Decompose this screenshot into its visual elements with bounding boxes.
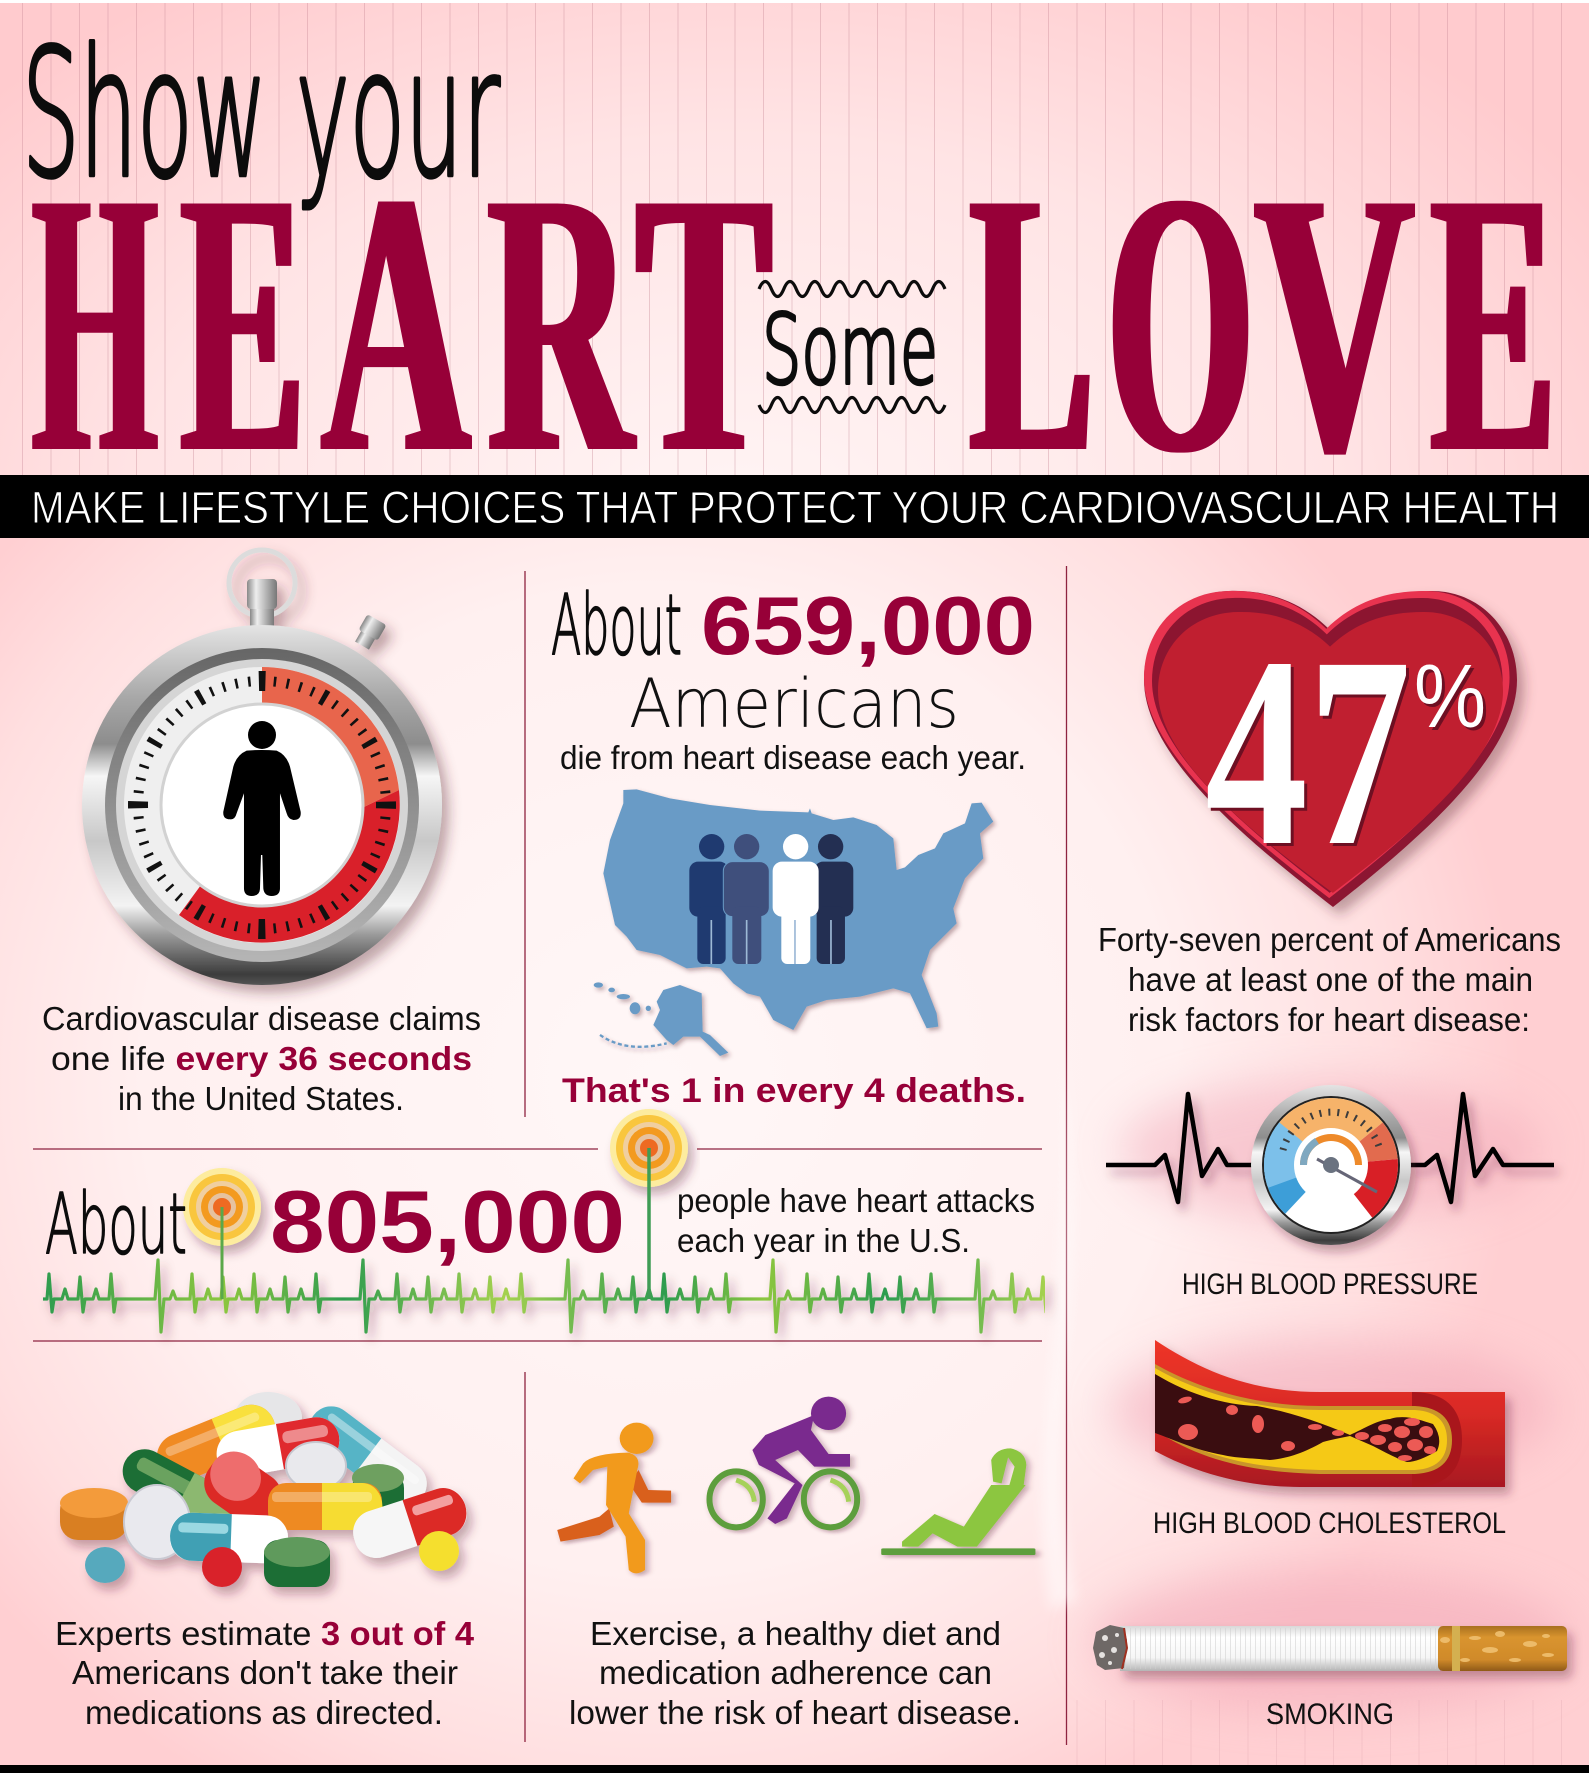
- icon: pulse target right: [610, 1109, 688, 1299]
- smoke: [1042, 1040, 1076, 1610]
- stat: about 805,000 heart attacks: [45, 1172, 1035, 1273]
- text: exercise: lower the risk of heart disease.: [569, 1694, 1021, 1731]
- stat: about 659,000 Americans: die from heart disease each year.: [560, 739, 1026, 776]
- title script: Show your: Show your: [22, 12, 500, 217]
- title: HEART: [33, 116, 772, 531]
- text: risk factors intro: risk factors for heart disease:: [1128, 1001, 1530, 1038]
- icon: pile of pills: [60, 1392, 473, 1587]
- title: HEART: R: [488, 116, 634, 531]
- text: medications: [55, 1615, 475, 1731]
- icon: cyclist: [709, 1397, 857, 1527]
- icon: four people: [689, 834, 853, 964]
- text: cardiovascular disease: in the United States.: [118, 1080, 404, 1117]
- title: HEART: H: [33, 116, 157, 531]
- icon: sit-ups: [881, 1448, 1035, 1555]
- stat: about 659,000 Americans: Americans: [629, 665, 959, 744]
- text: cardiovascular disease: Cardiovascular disease claims: [42, 1000, 481, 1037]
- text: cardiovascular disease: one life every 36 seconds: [51, 1040, 472, 1077]
- title: LOVE: V: [1255, 116, 1414, 531]
- title: some with wavy lines: [759, 282, 945, 412]
- icon: artery with plaque: [1155, 1340, 1505, 1487]
- stat: about 805,000 heart attacks: people have heart attacks: [677, 1182, 1035, 1219]
- stat: about 659,000 Americans: [551, 576, 1035, 776]
- chart: green heartbeat line: [0, 1260, 1079, 1332]
- icon: blood pressure gauge: [1106, 1085, 1554, 1245]
- text: medications: medications as directed.: [85, 1694, 443, 1731]
- text: 1 in every 4 deaths: That's 1 in every 4 deaths.: [562, 1072, 1026, 1110]
- title: HEART: T: [636, 116, 772, 531]
- icon: heart with 47%: %: [1414, 647, 1486, 747]
- icon: cigarette: [1093, 1625, 1567, 1671]
- label: high blood pressure: HIGH BLOOD PRESSURE: [1182, 1268, 1478, 1301]
- text: exercise: medication adherence can: [599, 1654, 992, 1691]
- title: LOVE: [970, 116, 1556, 531]
- icon: heart with 47%: 47: [1205, 601, 1411, 902]
- stat: about 805,000 heart attacks: each year in the U.S.: [677, 1222, 970, 1259]
- title: HEART: E: [181, 116, 305, 531]
- icon: runner: [557, 1423, 671, 1573]
- icon: US map with people: [594, 789, 993, 1056]
- text: risk factors intro: [1098, 921, 1561, 1038]
- text: risk factors intro: have at least one of the main: [1128, 961, 1533, 998]
- text: exercise: [569, 1615, 1021, 1731]
- icon: heart with 47%: [1144, 591, 1517, 907]
- text: cardiovascular disease: [42, 1000, 481, 1117]
- title: LOVE: O: [1107, 116, 1254, 531]
- icon: stopwatch: [82, 550, 442, 985]
- text: medications: Americans don't take their: [72, 1654, 458, 1691]
- label: high blood cholesterol: HIGH BLOOD CHOLESTEROL: [1153, 1507, 1506, 1540]
- text: medications: Experts estimate 3 out of 4: [55, 1615, 475, 1652]
- title: some with wavy lines: Some: [762, 294, 938, 406]
- stat: about 805,000 heart attacks: 805,000: [270, 1172, 625, 1271]
- title: LOVE: L: [970, 116, 1094, 531]
- label: smoking: SMOKING: [1266, 1698, 1394, 1731]
- stat: about 805,000 heart attacks: About: [45, 1175, 187, 1273]
- dividers: [33, 566, 1066, 1745]
- footer bar: [0, 1765, 1589, 1773]
- text: exercise: Exercise, a healthy diet and: [590, 1615, 1001, 1652]
- stat: about 659,000 Americans: About: [551, 576, 682, 674]
- stat: about 659,000 Americans: 659,000: [701, 579, 1035, 672]
- icon: pulse target left: [183, 1168, 261, 1299]
- title: HEART: A: [322, 116, 470, 531]
- text: risk factors intro: Forty-seven percent of Americans: [1098, 921, 1561, 958]
